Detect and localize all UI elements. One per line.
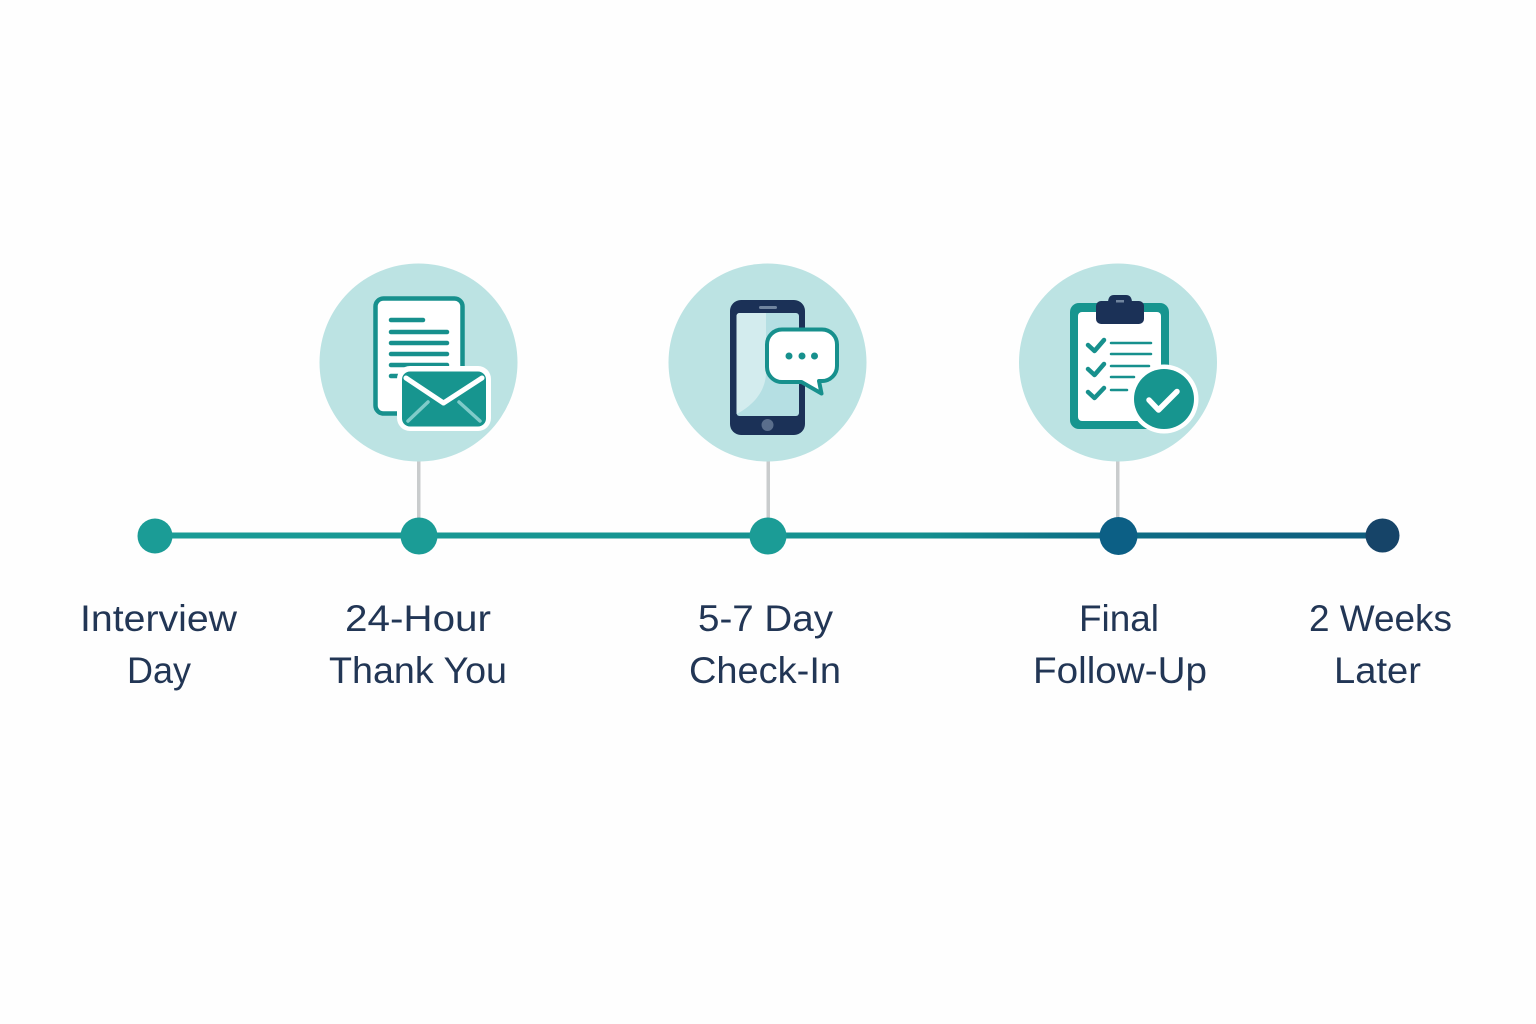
connector stems	[417, 458, 1120, 522]
icon: clipboard checklist	[1019, 264, 1217, 462]
label: 5-7 Day Check-In: Check-In	[689, 650, 841, 691]
icon: document and envelope	[320, 264, 518, 462]
timeline node: Interview Day	[138, 518, 172, 554]
label: Final Follow-Up: Follow-Up	[1033, 650, 1207, 691]
label: 5-7 Day Check-In	[689, 598, 841, 691]
label: 2 Weeks Later: Later	[1334, 650, 1421, 691]
label: 24-Hour Thank You: Thank You	[329, 650, 507, 691]
label: 2 Weeks Later	[1309, 598, 1452, 691]
icon: phone with chat bubble	[668, 264, 866, 462]
timeline node: 2 Weeks Later	[1366, 518, 1400, 552]
label: Interview Day: Interview	[80, 598, 237, 639]
timeline line	[155, 532, 1383, 538]
label: Final Follow-Up	[1033, 598, 1207, 691]
label: Interview Day	[80, 598, 237, 691]
label: 2 Weeks Later: 2 Weeks	[1309, 598, 1452, 639]
label: 24-Hour Thank You	[329, 598, 507, 691]
timeline node: 5-7 Day Check-In	[750, 518, 786, 554]
label: 5-7 Day Check-In: 5-7 Day	[698, 598, 834, 639]
label: 24-Hour Thank You: 24-Hour	[345, 598, 491, 639]
timeline node: Final Follow-Up	[1100, 517, 1138, 555]
timeline node: 24-Hour Thank You	[400, 518, 438, 554]
label: Interview Day: Day	[127, 650, 191, 691]
label: Final Follow-Up: Final	[1079, 598, 1159, 639]
